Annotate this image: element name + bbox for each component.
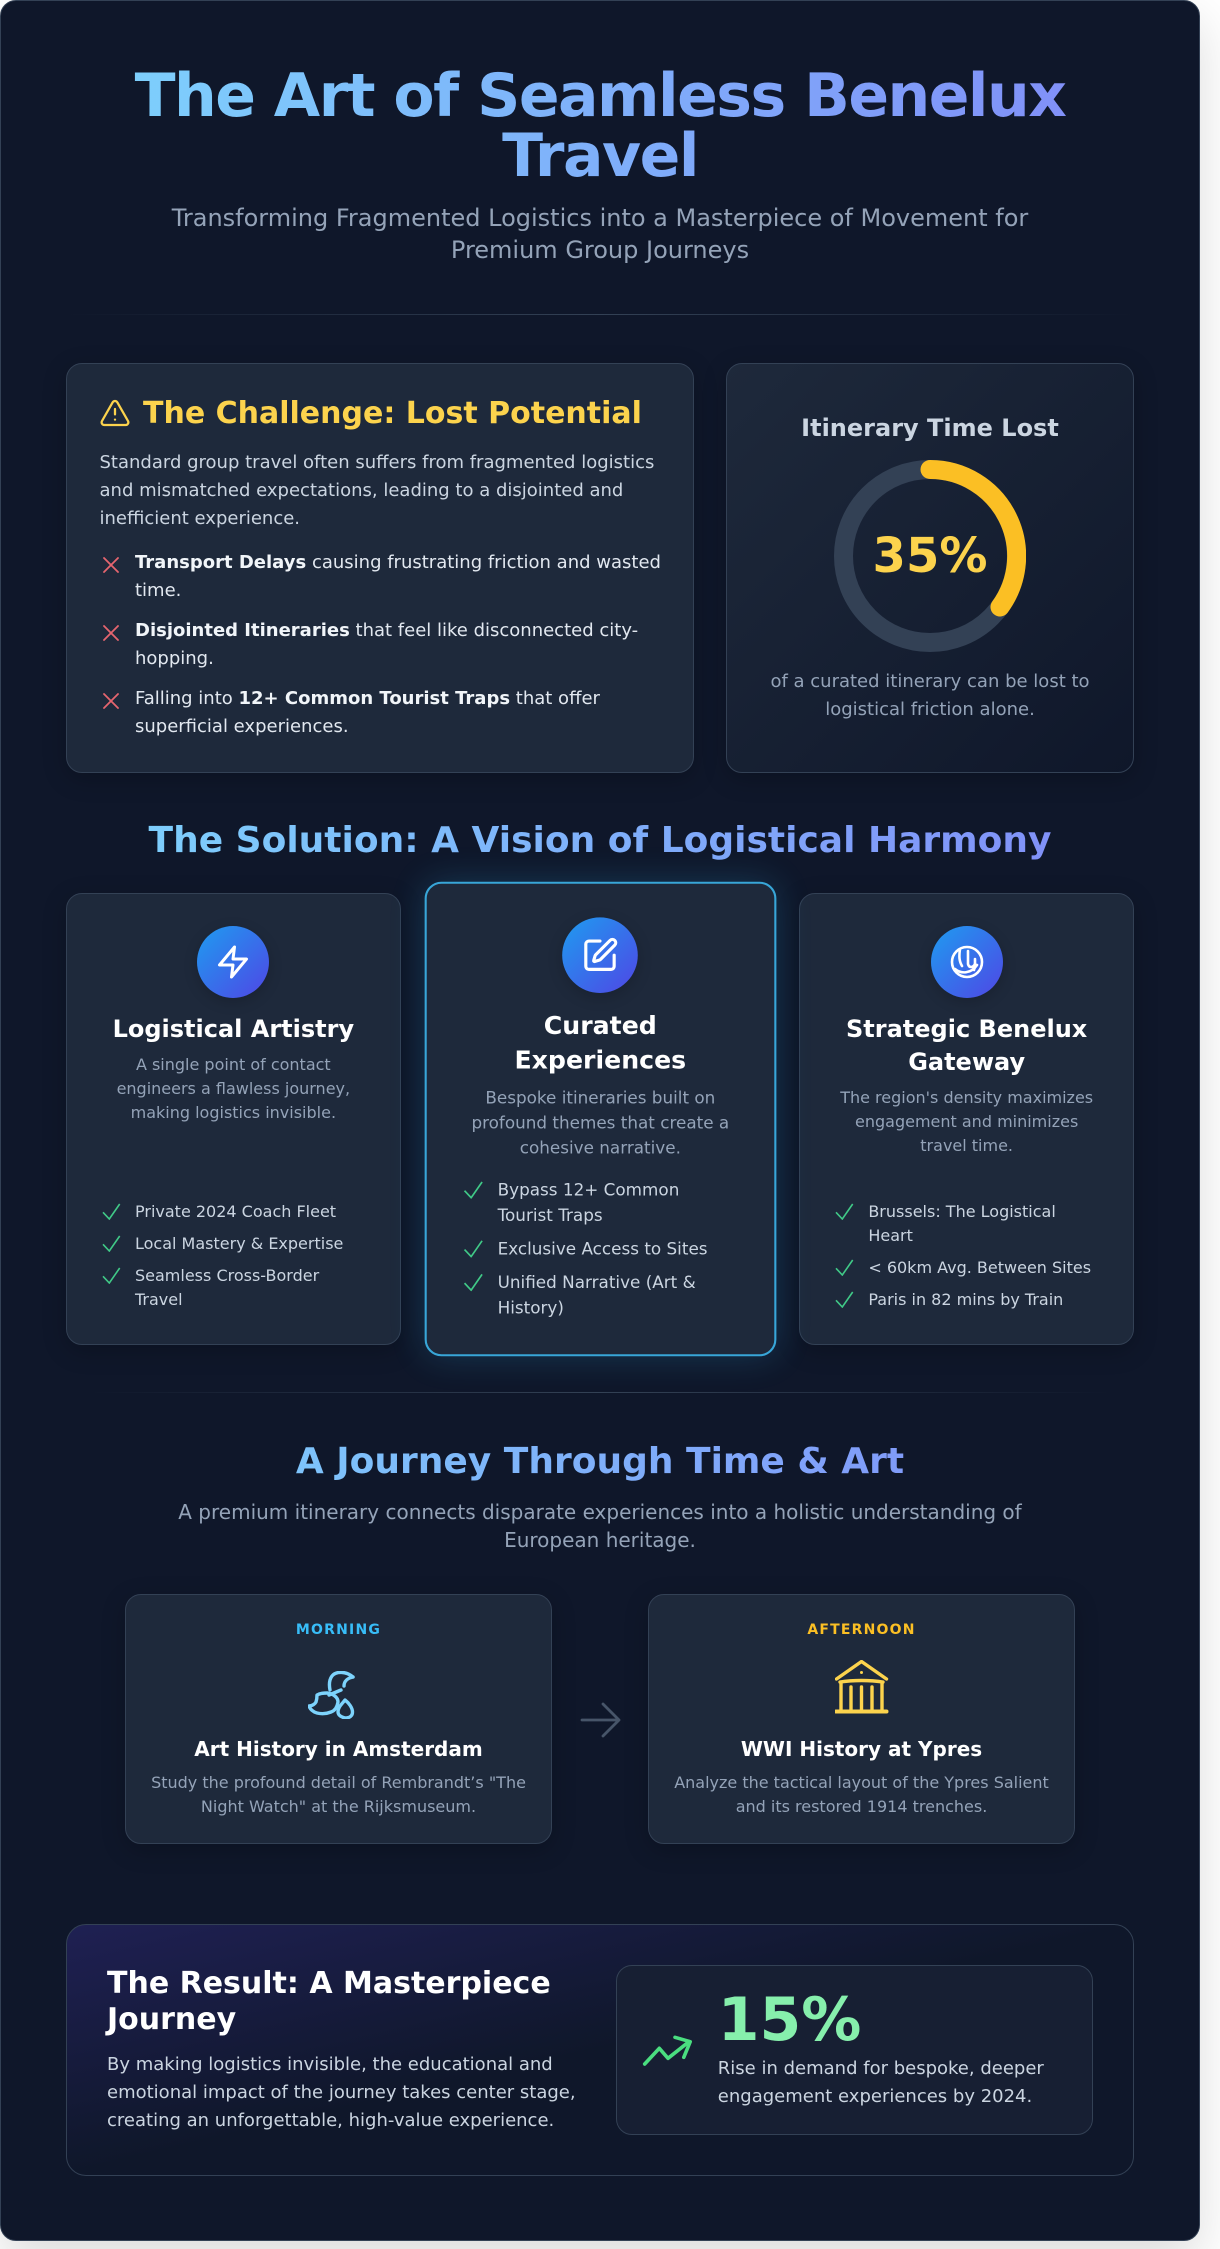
title: Travel: [502, 121, 698, 191]
feature: Paris in 82 mins by Train: [868, 1290, 1063, 1309]
icon: check: [464, 1182, 483, 1199]
card description: Analyze the tactical layout of the Ypres Salient: [674, 1773, 1049, 1792]
feature: Seamless Cross-Border: [135, 1266, 319, 1285]
feature: Travel: [135, 1290, 183, 1309]
stat value: 15%: [718, 1985, 861, 2055]
feature: Tourist Traps: [497, 1205, 602, 1225]
card description: [151, 1773, 526, 1816]
feature: Private 2024 Coach Fleet: [135, 1202, 336, 1221]
card description: engagement and minimizes: [855, 1112, 1078, 1131]
challenge description: [100, 452, 654, 529]
problem: transport delays: Transport Delays causing frustrating friction and wasted: [135, 552, 661, 572]
subtitle: Premium Group Journeys: [451, 236, 749, 264]
time label: AFTERNOON: [807, 1622, 916, 1638]
time label: MORNING: [296, 1622, 381, 1638]
panel: morning: [125, 1594, 552, 1844]
challenge heading: The Challenge: Lost Potential: [143, 396, 642, 431]
icon: x mark: [103, 625, 119, 641]
feature: Bypass 12+ Common: [497, 1180, 679, 1200]
title: [66, 66, 1134, 186]
card title: [846, 1015, 1087, 1076]
card title: Curated: [543, 1011, 657, 1040]
panel: afternoon: [648, 1594, 1075, 1844]
journey subheading: A premium itinerary connects disparate experiences into a holistic understanding of: [178, 1500, 1022, 1524]
problem: transport delays: [135, 552, 661, 600]
card title: Logistical Artistry: [113, 1015, 354, 1043]
feature: Brussels: The Logistical: [868, 1202, 1056, 1221]
icon: x mark: [103, 557, 119, 573]
stat caption: engagement experiences by 2024.: [718, 2086, 1032, 2107]
card description: travel time.: [920, 1136, 1013, 1155]
journey heading: [66, 1440, 1134, 1484]
panel: curated experiences (highlighted): [424, 881, 776, 1356]
result heading: Journey: [107, 2002, 236, 2037]
icon: trending up arrow: [642, 2036, 692, 2066]
card description: cohesive narrative.: [519, 1138, 681, 1158]
card description: Night Watch" at the Rijksmuseum.: [201, 1797, 476, 1816]
icon: paint brush: [308, 1671, 355, 1719]
feature: Local Mastery & Expertise: [135, 1234, 343, 1253]
result description: emotional impact of the journey takes center stage,: [107, 2082, 576, 2102]
card description: A single point of contact: [136, 1055, 331, 1074]
icon: check: [836, 1260, 854, 1276]
stat caption: Rise in demand for bespoke, deeper: [718, 2058, 1044, 2079]
card description: [471, 1087, 729, 1158]
feature: Heart: [868, 1226, 913, 1245]
journey subheading: [178, 1500, 1022, 1552]
card description: [674, 1773, 1049, 1816]
subtitle: Transforming Fragmented Logistics into a Masterpiece of Movement for: [172, 204, 1028, 232]
card description: [840, 1088, 1093, 1155]
stat box: demand rise: [616, 1965, 1093, 2135]
feature: < 60km Avg. Between Sites: [868, 1258, 1091, 1277]
icon: check: [836, 1292, 854, 1308]
card title: Gateway: [908, 1048, 1025, 1076]
solution heading: The Solution: A Vision of Logistical Harmony: [149, 820, 1051, 861]
card title: Experiences: [514, 1045, 686, 1075]
feature: [868, 1202, 1056, 1245]
icon: check: [464, 1274, 483, 1292]
challenge description: and mismatched expectations, leading to a disjointed and: [100, 480, 623, 501]
card description: [117, 1055, 350, 1122]
card title: WWI History at Ypres: [741, 1737, 982, 1761]
result description: creating an unforgettable, high-value experience.: [107, 2110, 554, 2130]
panel: the result: [66, 1924, 1134, 2176]
card description: making logistics invisible.: [131, 1103, 336, 1122]
icon: check: [836, 1204, 854, 1220]
panel: the challenge: [66, 363, 694, 773]
icon: check: [102, 1268, 120, 1284]
icon: check: [102, 1204, 120, 1220]
problem: transport delays: time.: [135, 580, 181, 600]
panel: strategic benelux gateway: [799, 893, 1134, 1345]
feature: [497, 1272, 696, 1317]
donut chart: 35%: [834, 460, 1026, 652]
card description: engineers a flawless journey,: [117, 1079, 350, 1098]
problem: tourist traps: Falling into 12+ Common Tourist Traps that offer: [135, 688, 600, 708]
result description: By making logistics invisible, the educational and: [107, 2054, 553, 2074]
card title: Art History in Amsterdam: [194, 1737, 483, 1761]
problem: disjointed itineraries: Disjointed Itineraries that feel like disconnected city-: [135, 620, 638, 640]
stat caption: of a curated itinerary can be lost to: [770, 671, 1090, 692]
result heading: The Result: A Masterpiece: [107, 1966, 551, 2000]
panel: itinerary time lost: [726, 363, 1134, 773]
title: The Art of Seamless Benelux: [135, 61, 1065, 131]
card description: profound themes that create a: [471, 1112, 729, 1132]
stat value: 35%: [873, 528, 987, 584]
icon: pencil in square: [562, 917, 638, 993]
feature: [497, 1180, 679, 1225]
card title: [514, 1011, 686, 1075]
feature: [134, 1266, 320, 1309]
stat caption: [770, 671, 1090, 720]
stat caption: logistical friction alone.: [825, 699, 1035, 720]
problem: disjointed itineraries: hopping.: [135, 648, 214, 668]
challenge description: Standard group travel often suffers from fragmented logistics: [100, 452, 654, 473]
feature: Exclusive Access to Sites: [497, 1238, 707, 1258]
feature: Unified Narrative (Art &: [497, 1272, 695, 1292]
icon: check: [102, 1236, 120, 1252]
stat heading: Itinerary Time Lost: [801, 414, 1059, 442]
card description: Bespoke itineraries built on: [485, 1087, 715, 1107]
journey heading: A Journey Through Time & Art: [296, 1441, 904, 1482]
stat caption: [718, 2058, 1044, 2107]
card description: Study the profound detail of Rembrandt’s "The: [151, 1773, 526, 1792]
arrow: morning to afternoon: [580, 1702, 620, 1738]
problem: tourist traps: superficial experiences.: [135, 716, 349, 736]
problem: tourist traps: [135, 688, 600, 736]
card description: and its restored 1914 trenches.: [736, 1797, 987, 1816]
icon: globe: [931, 926, 1003, 998]
result heading: [105, 1966, 551, 2037]
subtitle: [172, 204, 1028, 264]
icon: lightning bolt: [197, 926, 269, 998]
icon: x mark: [103, 693, 119, 709]
challenge description: inefficient experience.: [100, 508, 300, 529]
problem: disjointed itineraries: [135, 620, 638, 668]
panel: logistical artistry: [66, 893, 401, 1345]
icon: museum: [835, 1660, 888, 1714]
icon: warning triangle: [100, 400, 130, 426]
icon: check: [464, 1240, 483, 1258]
card description: The region's density maximizes: [840, 1088, 1093, 1107]
journey subheading: European heritage.: [504, 1528, 696, 1552]
feature: History): [497, 1297, 564, 1317]
card title: Strategic Benelux: [846, 1015, 1087, 1043]
result description: [107, 2054, 576, 2130]
